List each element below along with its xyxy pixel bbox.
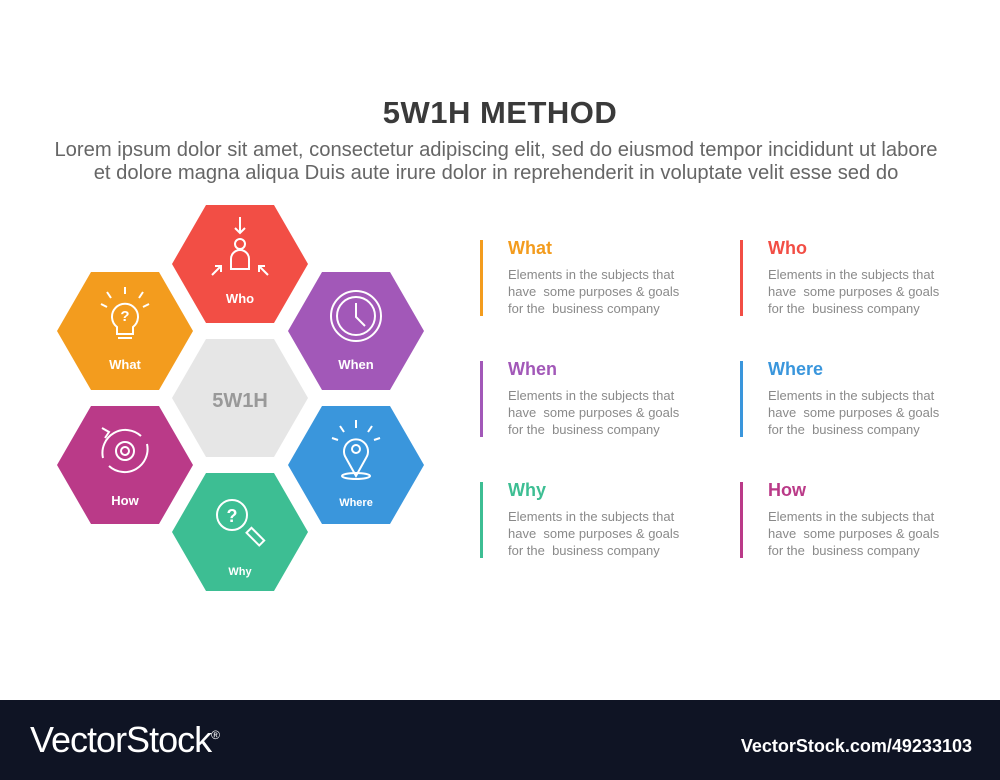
title: 5W1H METHOD xyxy=(383,95,617,130)
hexagon: center xyxy=(172,339,308,457)
text item: who: Elements in the subjects that have some purposes & goals for the business company xyxy=(768,267,939,316)
hexagon: who xyxy=(172,205,308,323)
footer logo: VectorStock® xyxy=(30,719,219,760)
text item: how: Elements in the subjects that have some purposes & goals for the business company xyxy=(768,509,939,558)
text item: what: What xyxy=(508,238,552,258)
hexagon: what xyxy=(57,272,193,390)
hexagon: what: What xyxy=(109,357,142,372)
text item: where: Where xyxy=(768,359,823,379)
footer bar xyxy=(0,700,1000,780)
text item: when: Elements in the subjects that have some purposes & goals for the business company xyxy=(508,388,679,437)
text item: when xyxy=(480,359,679,437)
hexagon: when: When xyxy=(338,357,374,372)
hexagon: where xyxy=(288,406,424,524)
hexagon: center: 5W1H xyxy=(212,390,268,412)
text item: how: How xyxy=(768,480,806,500)
hexagon: where: Where xyxy=(339,497,373,509)
hexagon: who: Who xyxy=(226,291,254,306)
text item: when: When xyxy=(508,359,557,379)
hexagon diagram xyxy=(57,205,424,591)
text item: what: Elements in the subjects that have some purposes & goals for the business company xyxy=(508,267,679,316)
subtitle: et dolore magna aliqua Duis aute irure dolor in reprehenderit in voluptate velit esse sed do xyxy=(94,162,898,184)
hexagon: when xyxy=(288,272,424,390)
hexagon: what: ? xyxy=(120,308,130,325)
hexagon: why: Why xyxy=(228,566,252,578)
text item: why xyxy=(480,480,679,558)
text item: why: Why xyxy=(508,480,546,500)
text item: why: Elements in the subjects that have some purposes & goals for the business company xyxy=(508,509,679,558)
footer id: VectorStock.com/49233103 xyxy=(741,736,972,756)
subtitle xyxy=(54,139,938,184)
text item: who: Who xyxy=(768,238,807,258)
hexagon: how xyxy=(57,406,193,524)
text item: where: Elements in the subjects that have some purposes & goals for the business company xyxy=(768,388,939,437)
text item: who xyxy=(740,238,939,316)
text item: what xyxy=(480,238,679,316)
hexagon: how: How xyxy=(111,493,140,508)
subtitle: Lorem ipsum dolor sit amet, consectetur adipiscing elit, sed do eiusmod tempor incididunt ut labore xyxy=(54,139,938,161)
hexagon: why xyxy=(172,473,308,591)
text item: how xyxy=(740,480,939,558)
text item: where xyxy=(740,359,939,437)
hexagon: why: ? xyxy=(226,506,238,526)
